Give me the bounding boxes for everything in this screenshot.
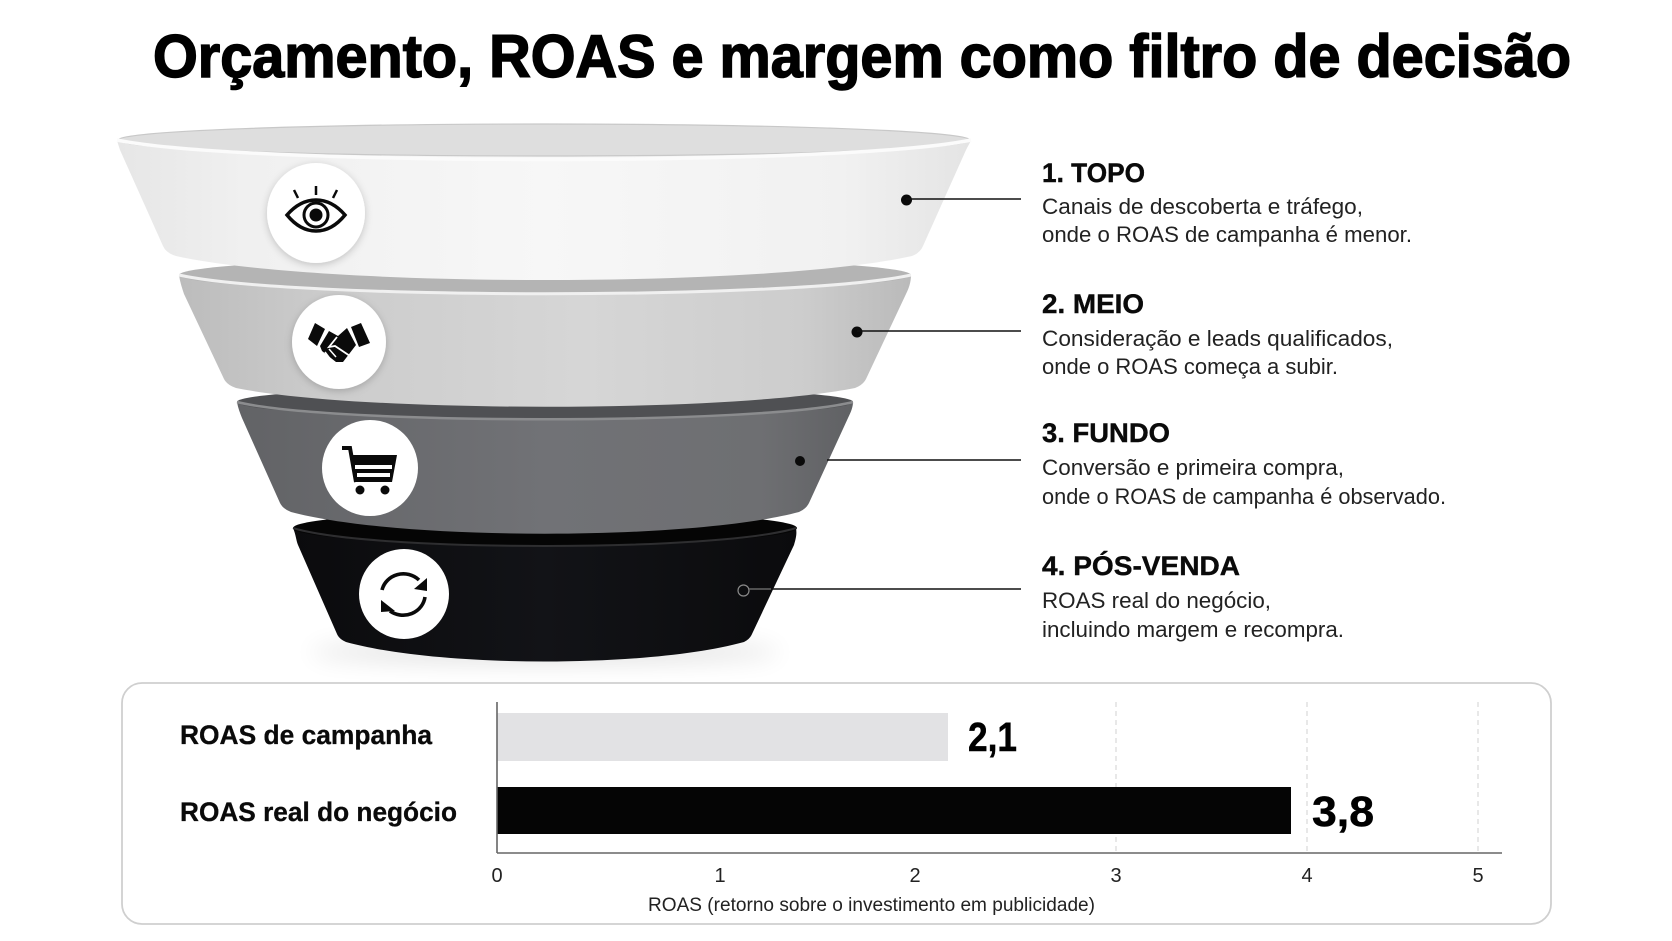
- text block: topo: onde o ROAS de campanha é menor.: [1042, 222, 1412, 247]
- text block: topo: 1. TOPO: [1042, 158, 1145, 188]
- callout dot: meio: [852, 326, 862, 338]
- axis title: ROAS (retorno sobre o investimento em publicidade): [648, 895, 1095, 916]
- layer 1: topo: [117, 124, 971, 280]
- title: Orçamento, ROAS e margem como filtro de decisão: [153, 23, 1571, 90]
- text block: meio: Consideração e leads qualificados,: [1042, 326, 1393, 351]
- callout dot: topo: [901, 194, 912, 206]
- value: 3,8: 3,8: [1312, 788, 1374, 836]
- icon: eye: [267, 163, 365, 263]
- text block: fundo: Conversão e primeira compra,: [1042, 455, 1344, 480]
- layer 3: fundo: [237, 386, 853, 534]
- icon: shopping cart: [322, 420, 418, 516]
- row label: ROAS de campanha: ROAS de campanha: [180, 720, 433, 750]
- connector line: pós-venda outer: [771, 588, 1021, 590]
- icon: handshake: [292, 295, 386, 389]
- text block: fundo: onde o ROAS de campanha é observado.: [1042, 484, 1446, 509]
- axis tick labels: 3: [1110, 865, 1122, 887]
- bar: ROAS real do negócio: [497, 787, 1291, 834]
- connector line: fundo: [827, 459, 1021, 461]
- axis tick labels: 4: [1301, 865, 1313, 887]
- axis tick labels: 0: [491, 865, 503, 887]
- bar: ROAS de campanha: [497, 713, 948, 761]
- text block: pós-venda: incluindo margem e recompra.: [1042, 617, 1344, 642]
- text block: pós-venda: [1042, 550, 1344, 642]
- callout dot: pós-venda: [738, 585, 749, 596]
- text block: pós-venda: 4. PÓS-VENDA: [1042, 550, 1240, 581]
- axis tick labels: 2: [909, 865, 921, 887]
- axis tick labels: 5: [1472, 865, 1484, 887]
- text block: fundo: 3. FUNDO: [1042, 418, 1170, 448]
- connector line: topo: [906, 198, 1021, 200]
- axes: [497, 702, 1502, 853]
- panel: bar chart: [122, 683, 1551, 924]
- funnel ground shadow: [310, 642, 780, 662]
- connector line: meio: [857, 330, 1021, 332]
- callout dot: fundo: [795, 456, 805, 466]
- axis tick labels: [491, 865, 1484, 887]
- row label: ROAS real do negócio: ROAS real do negócio: [180, 797, 457, 827]
- connector line: pós-venda: [749, 588, 771, 590]
- text block: topo: Canais de descoberta e tráfego,: [1042, 194, 1363, 219]
- text block: topo: [1042, 158, 1412, 247]
- funnel: [117, 124, 971, 662]
- text block: meio: 2. MEIO: [1042, 289, 1144, 319]
- value: 2,1: 2,1: [968, 714, 1017, 760]
- layer 2: meio: [179, 257, 911, 407]
- text block: fundo: [1042, 418, 1446, 509]
- text block: meio: [1042, 289, 1393, 379]
- text block: meio: onde o ROAS começa a subir.: [1042, 354, 1338, 379]
- text block: pós-venda: ROAS real do negócio,: [1042, 588, 1271, 613]
- axis tick labels: 1: [714, 865, 726, 887]
- icon: refresh: [359, 549, 449, 639]
- layer 4: pós-venda: [293, 511, 797, 662]
- grid lines: [1116, 702, 1478, 853]
